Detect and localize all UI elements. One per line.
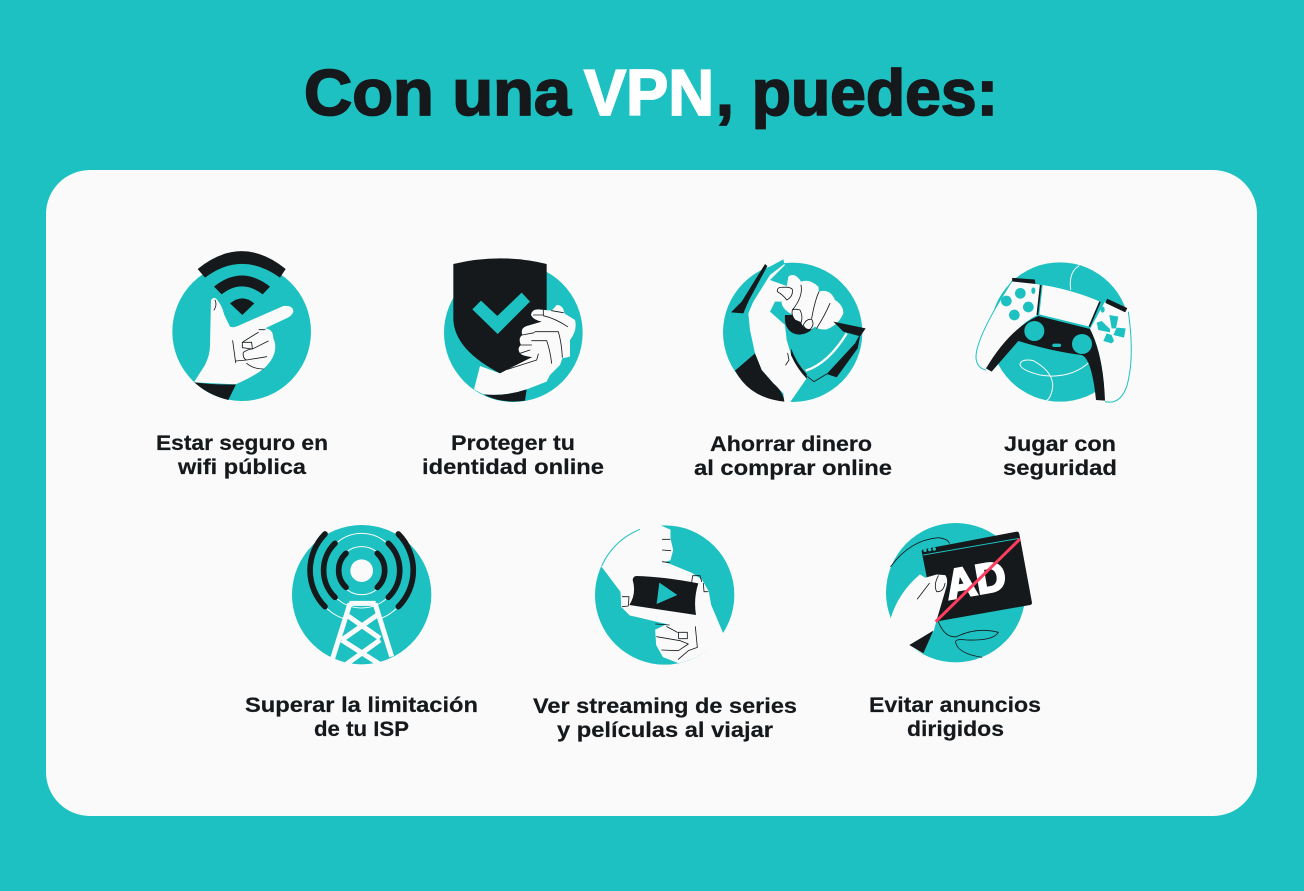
icon: hand holding shield bbox=[444, 258, 583, 402]
label: jugar: Jugar con bbox=[1004, 433, 1116, 456]
title: Con una bbox=[304, 56, 572, 129]
title: , puedes: bbox=[716, 56, 998, 129]
label: superar bbox=[245, 694, 478, 741]
panel: benefits card bbox=[46, 170, 1257, 816]
title: VPN bbox=[584, 56, 714, 129]
icon: game controller bbox=[976, 262, 1131, 402]
label: ahorrar: Ahorrar dinero bbox=[710, 433, 872, 456]
label: ver streaming bbox=[533, 695, 797, 742]
label: superar: de tu ISP bbox=[314, 718, 409, 741]
label: ahorrar: al comprar online bbox=[694, 457, 892, 480]
icon: hand crossing out ad window: AD bbox=[942, 551, 1009, 608]
label: estar seguro bbox=[156, 432, 328, 479]
icon: hands framing video bbox=[595, 525, 734, 665]
label: ver streaming: y películas al viajar bbox=[557, 719, 773, 742]
label: proteger bbox=[422, 432, 604, 479]
label: superar: Superar la limitación bbox=[245, 694, 478, 717]
label: proteger: Proteger tu bbox=[451, 432, 575, 455]
label: estar seguro: Estar seguro en bbox=[156, 432, 328, 455]
label: evitar anuncios bbox=[869, 694, 1041, 741]
label: evitar anuncios: dirigidos bbox=[907, 718, 1004, 741]
icon: hand pointing at wifi signal bbox=[172, 251, 311, 401]
label: evitar anuncios: Evitar anuncios bbox=[869, 694, 1041, 717]
icon: fist holding banknotes bbox=[723, 259, 866, 402]
icon: signal tower bbox=[292, 525, 431, 664]
label: jugar bbox=[1003, 433, 1117, 480]
icon: hand crossing out ad window bbox=[886, 523, 1032, 662]
label: ahorrar bbox=[694, 433, 892, 480]
label: proteger: identidad online bbox=[422, 456, 604, 479]
label: estar seguro: wifi pública bbox=[177, 456, 306, 479]
title bbox=[304, 56, 998, 129]
label: jugar: seguridad bbox=[1003, 457, 1117, 480]
label: ver streaming: Ver streaming de series bbox=[533, 695, 797, 718]
